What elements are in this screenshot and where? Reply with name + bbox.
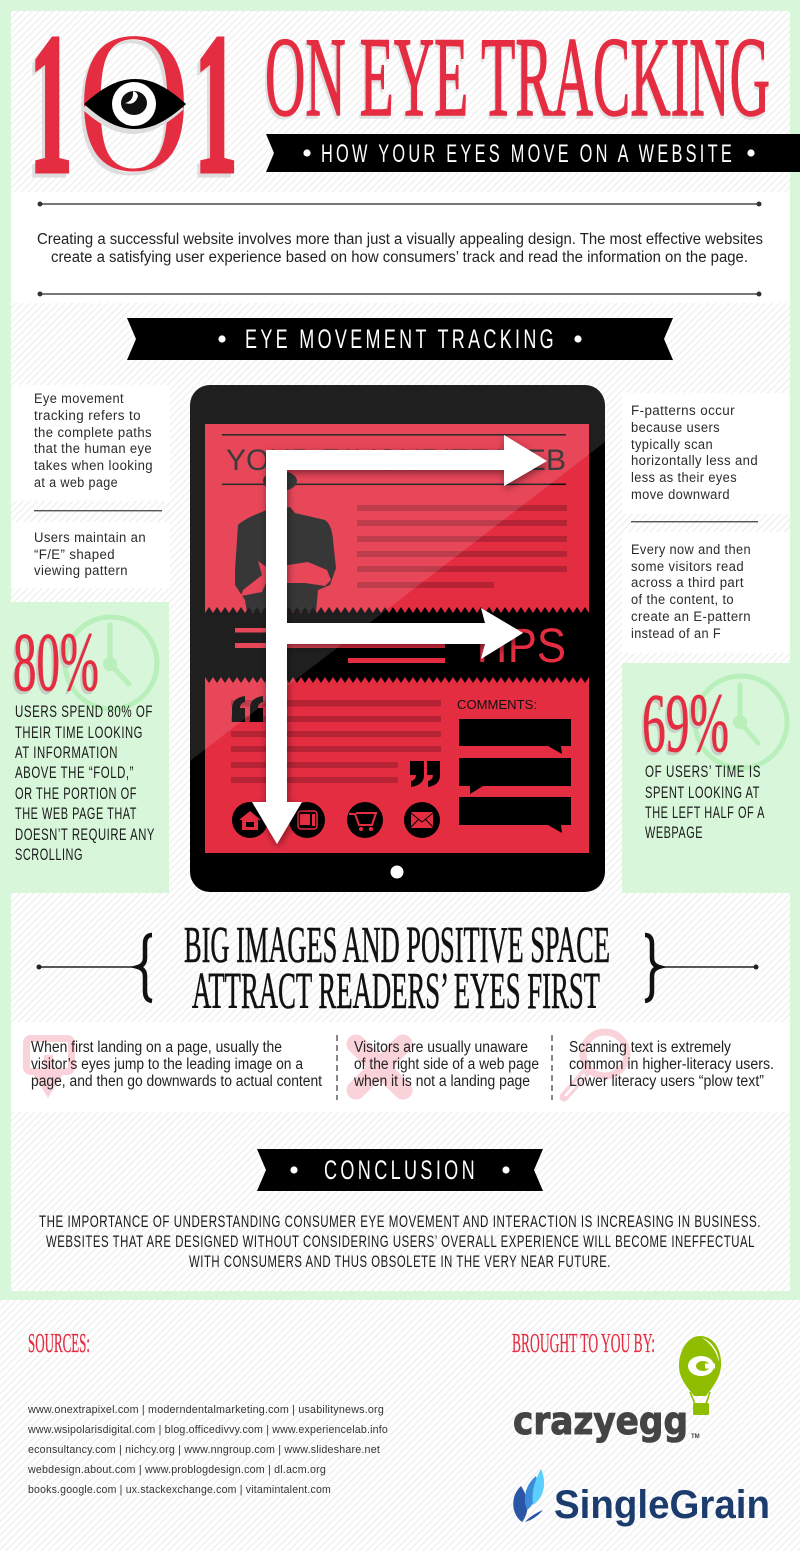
title number (35, 36, 234, 174)
stat description: WEBPAGE (645, 824, 703, 842)
text: common in higher-literacy users. (569, 1056, 774, 1073)
stat description: THE WEB PAGE THAT (15, 805, 137, 823)
title number: 1 (30, 0, 72, 215)
intro text (37, 231, 763, 266)
icon: eye (82, 79, 186, 134)
sources list: books.google.com | ux.stackexchange.com | vitamintalent.com (28, 1484, 331, 1496)
panel: 69% stat (622, 663, 800, 893)
right text block: some visitors read (631, 559, 744, 574)
screen header: YOUR FAVOURITE WEB (226, 444, 566, 477)
left text block: Users maintain an (34, 530, 146, 545)
text: Visitors are usually unaware (354, 1039, 528, 1056)
silhouette: man with crossed arms (235, 471, 336, 612)
sources list: www.wsipolarisdigital.com | blog.officedivvy.com | www.experiencelab.info (27, 1424, 388, 1436)
heading text (184, 917, 610, 1020)
text: visitor’s eyes jump to the leading image on a (31, 1056, 303, 1073)
title number shadow: 1 (27, 0, 69, 219)
icon: clock (65, 617, 157, 709)
tablet home button (390, 866, 404, 878)
right text block: typically scan (631, 437, 713, 452)
text: page, and then go downwards to actual content (31, 1073, 323, 1090)
article lines (357, 505, 567, 588)
stat description: AT INFORMATION (15, 744, 118, 762)
text (569, 1039, 774, 1090)
left text block: that the human eye (34, 441, 152, 456)
stat number: 69% (642, 677, 729, 770)
screen gloss (190, 385, 605, 761)
left text block: viewing pattern (34, 563, 128, 578)
heading banner: eye movement tracking (127, 318, 673, 360)
right text block: across a third part (631, 575, 744, 590)
conclusion text: WITH CONSUMERS AND THUS OBSOLETE IN THE VERY NEAR FUTURE. (189, 1253, 611, 1271)
panel: tablet screen (205, 424, 589, 853)
right text block: Every now and then (631, 542, 751, 557)
icon: home (232, 802, 268, 838)
text: of the right side of a web page (354, 1056, 539, 1073)
left text block: Eye movement (34, 391, 124, 406)
text: Lower literacy users “plow text” (569, 1073, 764, 1090)
icon: pin (26, 1038, 72, 1098)
subtitle banner (266, 134, 800, 172)
stat number: 69% (640, 680, 727, 773)
right text block: instead of an F (631, 626, 721, 641)
left text block (34, 391, 162, 578)
comments (457, 697, 571, 833)
title number shadow (32, 40, 231, 178)
right text block: horizontally less and (631, 453, 758, 468)
text (353, 1039, 539, 1090)
intro text: Creating a successful website involves more than just a visually appealing design. The most effective websites (37, 231, 763, 248)
brought to you by heading: BROUGHT TO YOU BY: (512, 1328, 655, 1358)
icon: cart (347, 802, 383, 838)
text: When first landing on a page, usually the (31, 1039, 282, 1056)
conclusion text (39, 1213, 761, 1271)
stat description: ABOVE THE “FOLD,” (15, 764, 134, 782)
logo: crazyegg (513, 1336, 721, 1443)
left brace (138, 935, 152, 1001)
heading banner: eye movement tracking: EYE MOVEMENT TRACKING (245, 324, 557, 354)
stat description: THEIR TIME LOOKING (15, 724, 143, 742)
intro text: create a satisfying user experience based on how consumers’ track and read the information on the page. (51, 249, 748, 266)
title number shadow: 1 (192, 0, 234, 219)
stat description (15, 703, 155, 864)
left text block: tracking refers to (34, 408, 141, 423)
stat number: 80% (11, 619, 97, 712)
right text block: of the content, to (631, 592, 734, 607)
stat description: SCROLLING (15, 846, 83, 864)
icon: envelope (404, 802, 440, 838)
heading: big images (36, 917, 758, 1020)
stat description: OR THE PORTION OF (15, 785, 137, 803)
stat description: USERS SPEND 80% OF (15, 703, 153, 721)
black band: TIPS (469, 620, 566, 673)
column 2: right side unaware (353, 1039, 539, 1090)
comments: COMMENTS: (457, 697, 537, 712)
left text block: the complete paths (34, 425, 152, 440)
title: 101 with eye (32, 36, 234, 178)
black band (205, 607, 589, 683)
heading banner: conclusion: CONCLUSION (324, 1155, 478, 1185)
stat number (640, 677, 729, 773)
right brace (645, 935, 659, 1001)
logo: singlegrain (513, 1469, 770, 1527)
heading banner: conclusion (257, 1149, 543, 1191)
text: Scanning text is extremely (569, 1039, 731, 1056)
right text block: move downward (631, 487, 730, 502)
title number: 1 (195, 0, 237, 215)
panel: 80% stat (0, 602, 169, 893)
right text block: because users (631, 420, 720, 435)
tablet mockup (190, 385, 605, 892)
text: when it is not a landing page (353, 1073, 530, 1090)
stat number (11, 616, 99, 712)
logo: crazyegg: crazyegg (513, 1399, 688, 1443)
right text block (631, 403, 758, 641)
left text block: at a web page (34, 475, 118, 490)
right text block: less as their eyes (631, 470, 737, 485)
column 1: leading image (26, 1038, 323, 1098)
stat description (645, 763, 765, 842)
logo: crazyegg: TM (691, 1434, 700, 1440)
arrow: F pattern (252, 435, 547, 844)
sources list: webdesign.about.com | www.problogdesign.com | dl.acm.org (27, 1464, 326, 1476)
icon: balloon (679, 1336, 721, 1415)
column 3: scanning text (564, 1032, 774, 1097)
icon: cross (356, 1044, 403, 1090)
left text block: “F/E” shaped (34, 547, 115, 562)
right text block: F-patterns occur (631, 403, 735, 418)
sources list: econsultancy.com | nichcy.org | www.nngroup.com | www.slideshare.net (28, 1444, 380, 1456)
icon: magnifier (564, 1032, 627, 1097)
icon row (232, 802, 440, 838)
icon: leaves (513, 1469, 544, 1522)
stat number: 80% (13, 616, 99, 709)
icon: phone (289, 802, 325, 838)
logo: singlegrain: SingleGrain (554, 1483, 770, 1527)
left text block: takes when looking (34, 458, 153, 473)
text (31, 1039, 323, 1090)
quote block (231, 696, 441, 787)
sources list (27, 1404, 388, 1496)
right text block: create an E-pattern (631, 609, 751, 624)
sources list: www.onextrapixel.com | moderndentalmarketing.com | usabilitynews.org (27, 1404, 384, 1416)
icon: clock (695, 676, 787, 768)
stat description: DOESN’T REQUIRE ANY (15, 826, 155, 844)
text: SOURCES: (28, 1328, 90, 1358)
